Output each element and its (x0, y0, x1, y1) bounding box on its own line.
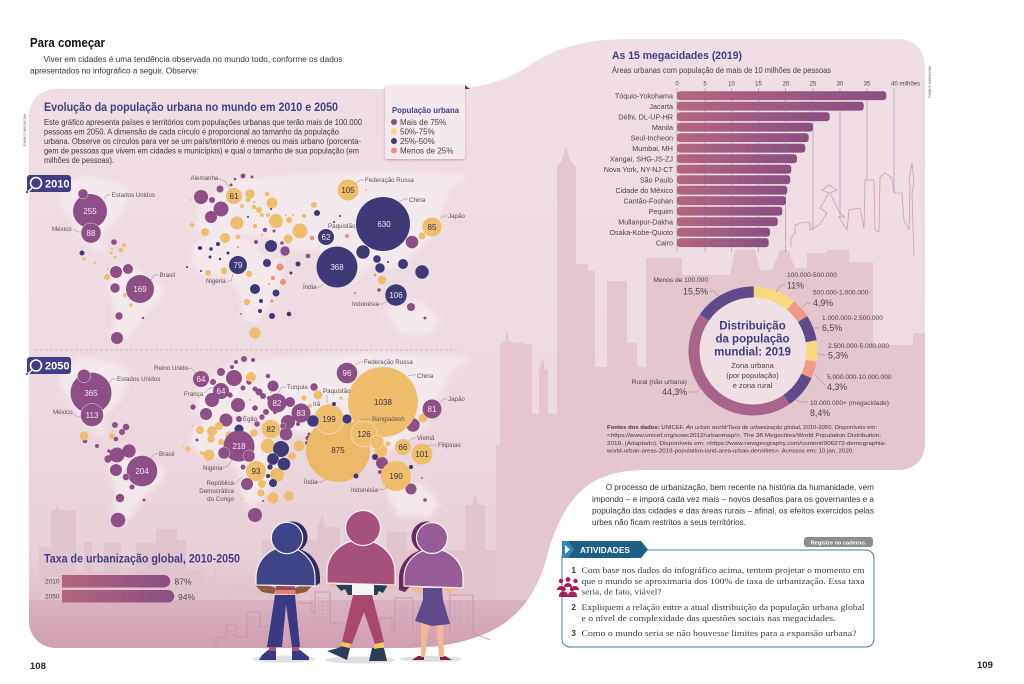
labels 2010: Paquistão (328, 223, 356, 230)
question 1: Com base nos dados do infográfico acima, tentem projetar o momento em (582, 565, 865, 575)
bar chart: megacidades: 35 (864, 82, 871, 88)
bar chart: megacidades: São Paulo (640, 175, 673, 184)
illustration: person 2 (325, 510, 395, 664)
bar chart: megacidades: Manila (652, 123, 673, 132)
data sources (606, 425, 886, 454)
bubble: Estados Unidos 2010: 255 (83, 207, 97, 216)
tag 2050 (26, 357, 71, 375)
question 1 (572, 565, 865, 596)
donut labels: Menos de 100.000 (653, 277, 708, 284)
description text: pessoas em 2050. A dimensão de cada círculo é proporcional ao tamanho da população (44, 128, 340, 136)
donut labels: 8,4% (810, 408, 830, 418)
bubble: Federação Russa 2050 (337, 363, 357, 383)
bubble: Brasil 2010 (126, 275, 154, 303)
bubble: Paquistão 2050: 199 (322, 415, 336, 424)
tag: registre no caderno (804, 537, 873, 547)
dashed divider (35, 349, 457, 351)
bubble: Alemanha 2010 (226, 188, 242, 204)
bubble: França 2050 (213, 383, 229, 399)
bubble: Japão 2010 (422, 218, 442, 236)
bubble: Filipinas 2050: 101 (415, 450, 429, 459)
bubble: Índia 2010 (316, 246, 358, 288)
bar chart: megacidades: Jacarta (649, 102, 673, 111)
donut labels: 6,5% (822, 323, 842, 333)
question 3: 3 (572, 629, 576, 638)
donut labels: 5,3% (828, 350, 848, 360)
skyline silhouettes (29, 147, 925, 648)
bubble: China 2010: 630 (377, 220, 391, 229)
bubble: Reino Unido 2050 (193, 371, 209, 387)
donut chart: distribuição da população: (por população) (726, 371, 779, 380)
description text: urbana. Observe os círculos para ver se um país/território é menos ou mais urbano (porcenta- (44, 137, 361, 146)
bubble: Paquistão 2050 (314, 404, 344, 434)
intro text: Viver em cidades é uma tendência observada no mundo todo, conforme os dados (44, 54, 342, 64)
bubble: Vietnã 2050 (395, 439, 411, 455)
bubble: Brasil 2050: 204 (135, 467, 149, 476)
question 3: Como o mundo seria se não houvesse limites para a expansão urbana? (582, 628, 857, 638)
intro text (30, 54, 342, 76)
bar chart: megacidades: Cairo (656, 238, 673, 247)
labels 2010: Índia (303, 284, 317, 291)
labels 2050: México (53, 409, 73, 416)
tag 2010: 2010 (45, 178, 69, 190)
bubble: Estados Unidos 2050: 365 (84, 389, 98, 398)
donut labels: 100.000-500.000 (787, 272, 837, 279)
credit right: FABIO NIENOW (927, 66, 932, 98)
donut chart: distribuição da população: mundial: 2019 (714, 346, 791, 358)
labels 2050: Irã (313, 401, 321, 408)
data sources: <https://www.unicef.org/sowc2012/urbanmap/>. The 38 Megacities/World Population Distribution: (607, 433, 881, 439)
bubble: Federação Russa 2050: 96 (343, 369, 352, 378)
labels 2010: Nigéria (206, 278, 226, 285)
donut labels: 5.000.000-10.000.000 (827, 374, 892, 381)
donut chart: distribuição da população: Distribuição (719, 320, 786, 332)
bubble: Nigéria 2010: 79 (234, 261, 243, 270)
data sources: world-urban-areas-2019-population-land-area-urban-densities>. Acessos em: 10 jan. 2020. (606, 448, 854, 454)
bubble: Nigéria 2050 (218, 430, 255, 462)
bubble: Egito 2050 (262, 420, 280, 438)
bar chart: megacidades: 0 (675, 82, 679, 88)
labels 2010: Estados Unidos (112, 192, 155, 199)
page number 108: 108 (30, 661, 46, 672)
bubble: México 2010 (81, 223, 101, 243)
labels 2010: Brasil (160, 272, 175, 279)
bubble: Bangladesh 2050 (351, 421, 377, 447)
bubble: China 2050: 1038 (374, 398, 392, 407)
bar chart: megacidades: Cidade do México (615, 186, 673, 195)
bubble: Japão 2050 (422, 400, 442, 418)
bubble: Indonésia 2050: 190 (389, 472, 403, 481)
bar chart: megacidades (604, 82, 920, 252)
bubble: Índia 2050 (306, 418, 370, 482)
bubble: Índia 2010: 368 (330, 263, 344, 272)
banner: atividades (562, 541, 648, 558)
bar chart: megacidades: 15 (755, 82, 762, 88)
question 1: seria, de fato, viável? (582, 586, 662, 596)
donut labels: 2.500.000-5.000.000 (828, 343, 889, 350)
illustration: person 3 (399, 522, 463, 662)
bubble: RDC 2050: 93 (252, 467, 261, 476)
question 2: 2 (572, 603, 576, 612)
legend: população urbana: 50%-75% (400, 128, 435, 136)
data sources: 2019. (Adaptado). Disponíveis em: <https://www.newgeography.com/content/006272-demographia- (607, 441, 886, 447)
legend: população urbana (385, 85, 470, 159)
bar chart: megacidades: 10 (728, 82, 735, 88)
donut chart: distribuição da população: da população (715, 334, 790, 346)
bar chart: megacidades: Xangai, SHG-JS-ZJ (610, 154, 673, 163)
labels 2050: Turquia (287, 384, 308, 391)
bubble: Bangladesh 2050: 126 (357, 430, 371, 439)
bar chart: megacidades: 40 milhões (891, 82, 920, 88)
bubble: Japão 2050: 81 (428, 405, 437, 414)
question 2: e o nível de complexidade das questões sociais nas megacidades. (582, 613, 836, 623)
labels 2050: Estados Unidos (117, 376, 160, 383)
bar chart: megacidades: Pequim (649, 207, 673, 216)
bubble: Japão 2010: 85 (428, 223, 437, 232)
donut labels: 4,9% (813, 298, 833, 308)
bubble: Brasil 2010: 169 (133, 285, 147, 294)
labels 2010: Federação Russa (365, 177, 414, 184)
bubble: Paquistão 2010 (318, 229, 334, 245)
tag 2050: 2050 (45, 360, 69, 372)
labels 2050: Federação Russa (364, 359, 413, 366)
labels 2050: do Congo (207, 496, 235, 503)
banner: atividades: ATIVIDADES (580, 545, 630, 555)
labels 2010: Alemanha (190, 175, 219, 182)
donut chart: distribuição da população (632, 272, 892, 418)
bar chart: megacidades: 5 (703, 82, 707, 88)
bar chart: megacidades: Cantão-Foshan (623, 196, 673, 205)
bubble: Irã 2050 (280, 404, 310, 429)
labels 2050: Egito (243, 416, 258, 423)
page number 109: 109 (977, 660, 993, 671)
closing paragraph: O processo de urbanização, bem recente na história da humanidade, vem (606, 482, 874, 492)
description text (44, 118, 363, 165)
legend: população urbana: População urbana (392, 106, 460, 115)
donut chart: distribuição da população: e zona rural (733, 381, 773, 390)
question 1: 1 (572, 566, 576, 575)
donut labels: 11% (787, 280, 804, 290)
donut labels: 44,3% (662, 387, 687, 397)
tag 2010 (26, 175, 71, 193)
world map 2050 (60, 352, 470, 527)
bubble map 2010 (52, 174, 465, 344)
bar chart: taxa de urbanização: 87% (174, 576, 192, 586)
bubble: Indonésia 2010 (385, 284, 407, 306)
heading: Para começar: Para começar (30, 36, 105, 50)
bar chart: megacidades: Nova York, NY-NJ-CT (604, 165, 674, 174)
bar chart: taxa de urbanização: 2010 (45, 578, 60, 586)
legend: população urbana: Menos de 25% (400, 146, 453, 156)
closing paragraph: urbes não ficam restritos a seus territórios. (592, 517, 746, 527)
tag: registre no caderno: Registre no caderno. (811, 540, 867, 546)
labels 2050: Indonésia (351, 487, 378, 494)
donut labels: 15,5% (683, 286, 708, 296)
city outline: bottom skyline (216, 592, 490, 647)
closing paragraph: população das cidades e das áreas rurais – afinal, os efeitos exercidos pelas (592, 506, 874, 516)
bar chart: megacidades: Délhi, DL-UP-HR (618, 112, 673, 121)
description text: Este gráfico apresenta países e territórios com populações urbanas que terão mais de 100.000 (44, 118, 363, 127)
labels 2050: Bangladesh (372, 416, 405, 423)
donut labels: 4,3% (827, 382, 847, 392)
closing paragraph (592, 482, 874, 527)
title: urban population: Evolução da população urbana no mundo em 2010 e 2050 (44, 100, 338, 114)
bubble: Turquia 2050: 82 (273, 399, 282, 408)
donut labels: 1.000.000-2.500.000 (822, 315, 883, 322)
subtitle: megacidades: Áreas urbanas com população de mais de 10 milhões de pessoas (612, 66, 831, 75)
bar chart: megacidades: Seul-Incheon (631, 133, 673, 142)
credit left: FABIO NIENOW (22, 114, 27, 146)
bar chart: taxa de urbanização: 2050 (45, 594, 60, 600)
legend: população urbana: Mais de 75% (400, 118, 446, 127)
labels 2050: Paquistão (323, 388, 351, 395)
bar chart: megacidades: Mullanpur-Dakha (618, 217, 673, 226)
bubble: Reino Unido 2050: 64 (197, 375, 206, 384)
bubble: Egito 2050: 82 (267, 425, 276, 434)
title: megacidades: As 15 megacidades (2019) (612, 50, 742, 62)
bubble: China 2010 (356, 197, 410, 251)
bubble: Turquia 2050 (268, 394, 286, 412)
bubble: Federação Russa 2010 (338, 180, 358, 200)
labels 2010: Japão (448, 213, 465, 220)
labels 2050 (53, 359, 465, 503)
bubble: México 2050 (80, 404, 104, 426)
bubble: França 2050: 64 (217, 387, 226, 396)
illustration: person 1 (253, 522, 320, 662)
bar chart: megacidades: Mumbai, MH (632, 144, 673, 153)
question 2 (572, 602, 865, 623)
labels 2010: Indonésia (352, 301, 379, 308)
page background panel (29, 39, 925, 648)
bubble: Nigéria 2010 (229, 256, 247, 274)
labels 2050: China (417, 373, 434, 380)
bubble: Indonésia 2010: 106 (389, 291, 403, 300)
description text: milhões de pessoas). (44, 156, 114, 165)
donut labels (632, 272, 892, 418)
bubble: China 2050 (348, 367, 418, 437)
bubble: Indonésia 2050 (381, 461, 411, 491)
bubble: Índia 2050: 875 (331, 446, 345, 455)
labels 2050: Vietnã (417, 435, 435, 442)
bar chart: megacidades: 30 (837, 82, 844, 88)
closing paragraph: impondo – e imporá cada vez mais – novos desafios para os governantes e a (592, 494, 874, 504)
bar chart: taxa de urbanização (45, 575, 195, 602)
labels 2050: França (184, 391, 204, 398)
labels 2050: Filipinas (438, 442, 461, 449)
labels 2010 (52, 175, 465, 308)
donut labels: 10.000.000+ (megacidade) (810, 400, 889, 407)
bubble: Alemanha 2010: 61 (230, 192, 239, 201)
description text: gem de pessoas que vivem em cidades e municípios) e qual o tamanho de sua população (em (44, 146, 359, 156)
bubble: Brasil 2050 (122, 456, 157, 486)
labels 2050: Nigéria (203, 465, 223, 472)
bar chart: megacidades: Osaka-Kobe-Quioto (609, 228, 673, 237)
bubble: Filipinas 2050 (412, 444, 432, 464)
question 2: Expliquem a relação entre a atual distribuição da população urbana global (582, 602, 865, 612)
donut chart: distribuição da população: Zona urbana (731, 361, 775, 370)
labels 2050: Democrática (199, 488, 235, 495)
labels 2050: República (206, 480, 235, 487)
labels 2050: Índia (304, 479, 318, 486)
bubble: Estados Unidos 2050 (70, 369, 112, 414)
donut labels: Rural (não urbana) (632, 379, 687, 386)
bar chart: megacidades: 20 (783, 82, 790, 88)
bubble: Paquistão 2010: 62 (322, 233, 331, 242)
bubble: Nigéria 2050: 218 (232, 442, 246, 451)
bar chart: taxa de urbanização: 94% (178, 592, 195, 602)
intro text: apresentados no infográfico a seguir. Observe: (30, 66, 199, 76)
labels 2050: Brasil (159, 451, 174, 458)
legend: população urbana: 25%-50% (400, 137, 435, 146)
bar chart: megacidades: 25 (810, 82, 817, 88)
labels 2010: México (52, 226, 72, 233)
city outline: megacities skyline (791, 163, 914, 257)
bubble: Vietnã 2050: 66 (399, 443, 408, 452)
labels 2050: Reino Unido (154, 365, 189, 372)
bubble: México 2010: 88 (87, 229, 96, 238)
bubble: México 2050: 113 (86, 411, 99, 420)
labels 2010: China (409, 197, 426, 204)
bubble map 2050 (53, 356, 465, 527)
icon: group work (557, 577, 579, 597)
bubble: Irã 2050: 83 (297, 409, 306, 418)
bubble: RDC 2050 (246, 461, 266, 481)
activities box (562, 541, 874, 647)
title: taxa de urbanização: Taxa de urbanização global, 2010-2050 (44, 554, 240, 566)
donut labels: 500.000-1.000.000 (813, 290, 869, 296)
data sources: Fontes dos dados: UNICEF. An urban world/Taxa de urbanização global, 2010-2050. Disponíveis em: (607, 425, 877, 431)
bubble: Estados Unidos 2010 (73, 189, 107, 228)
world map 2010 (60, 170, 470, 345)
labels 2050: Japão (448, 396, 465, 403)
question 1: que o mundo se aproximaria dos 100% de taxa de urbanização. Essa taxa (582, 576, 865, 586)
bar chart: megacidades: Tóquio-Yokohama (615, 91, 673, 100)
bubble: Federação Russa 2010: 105 (341, 186, 355, 195)
